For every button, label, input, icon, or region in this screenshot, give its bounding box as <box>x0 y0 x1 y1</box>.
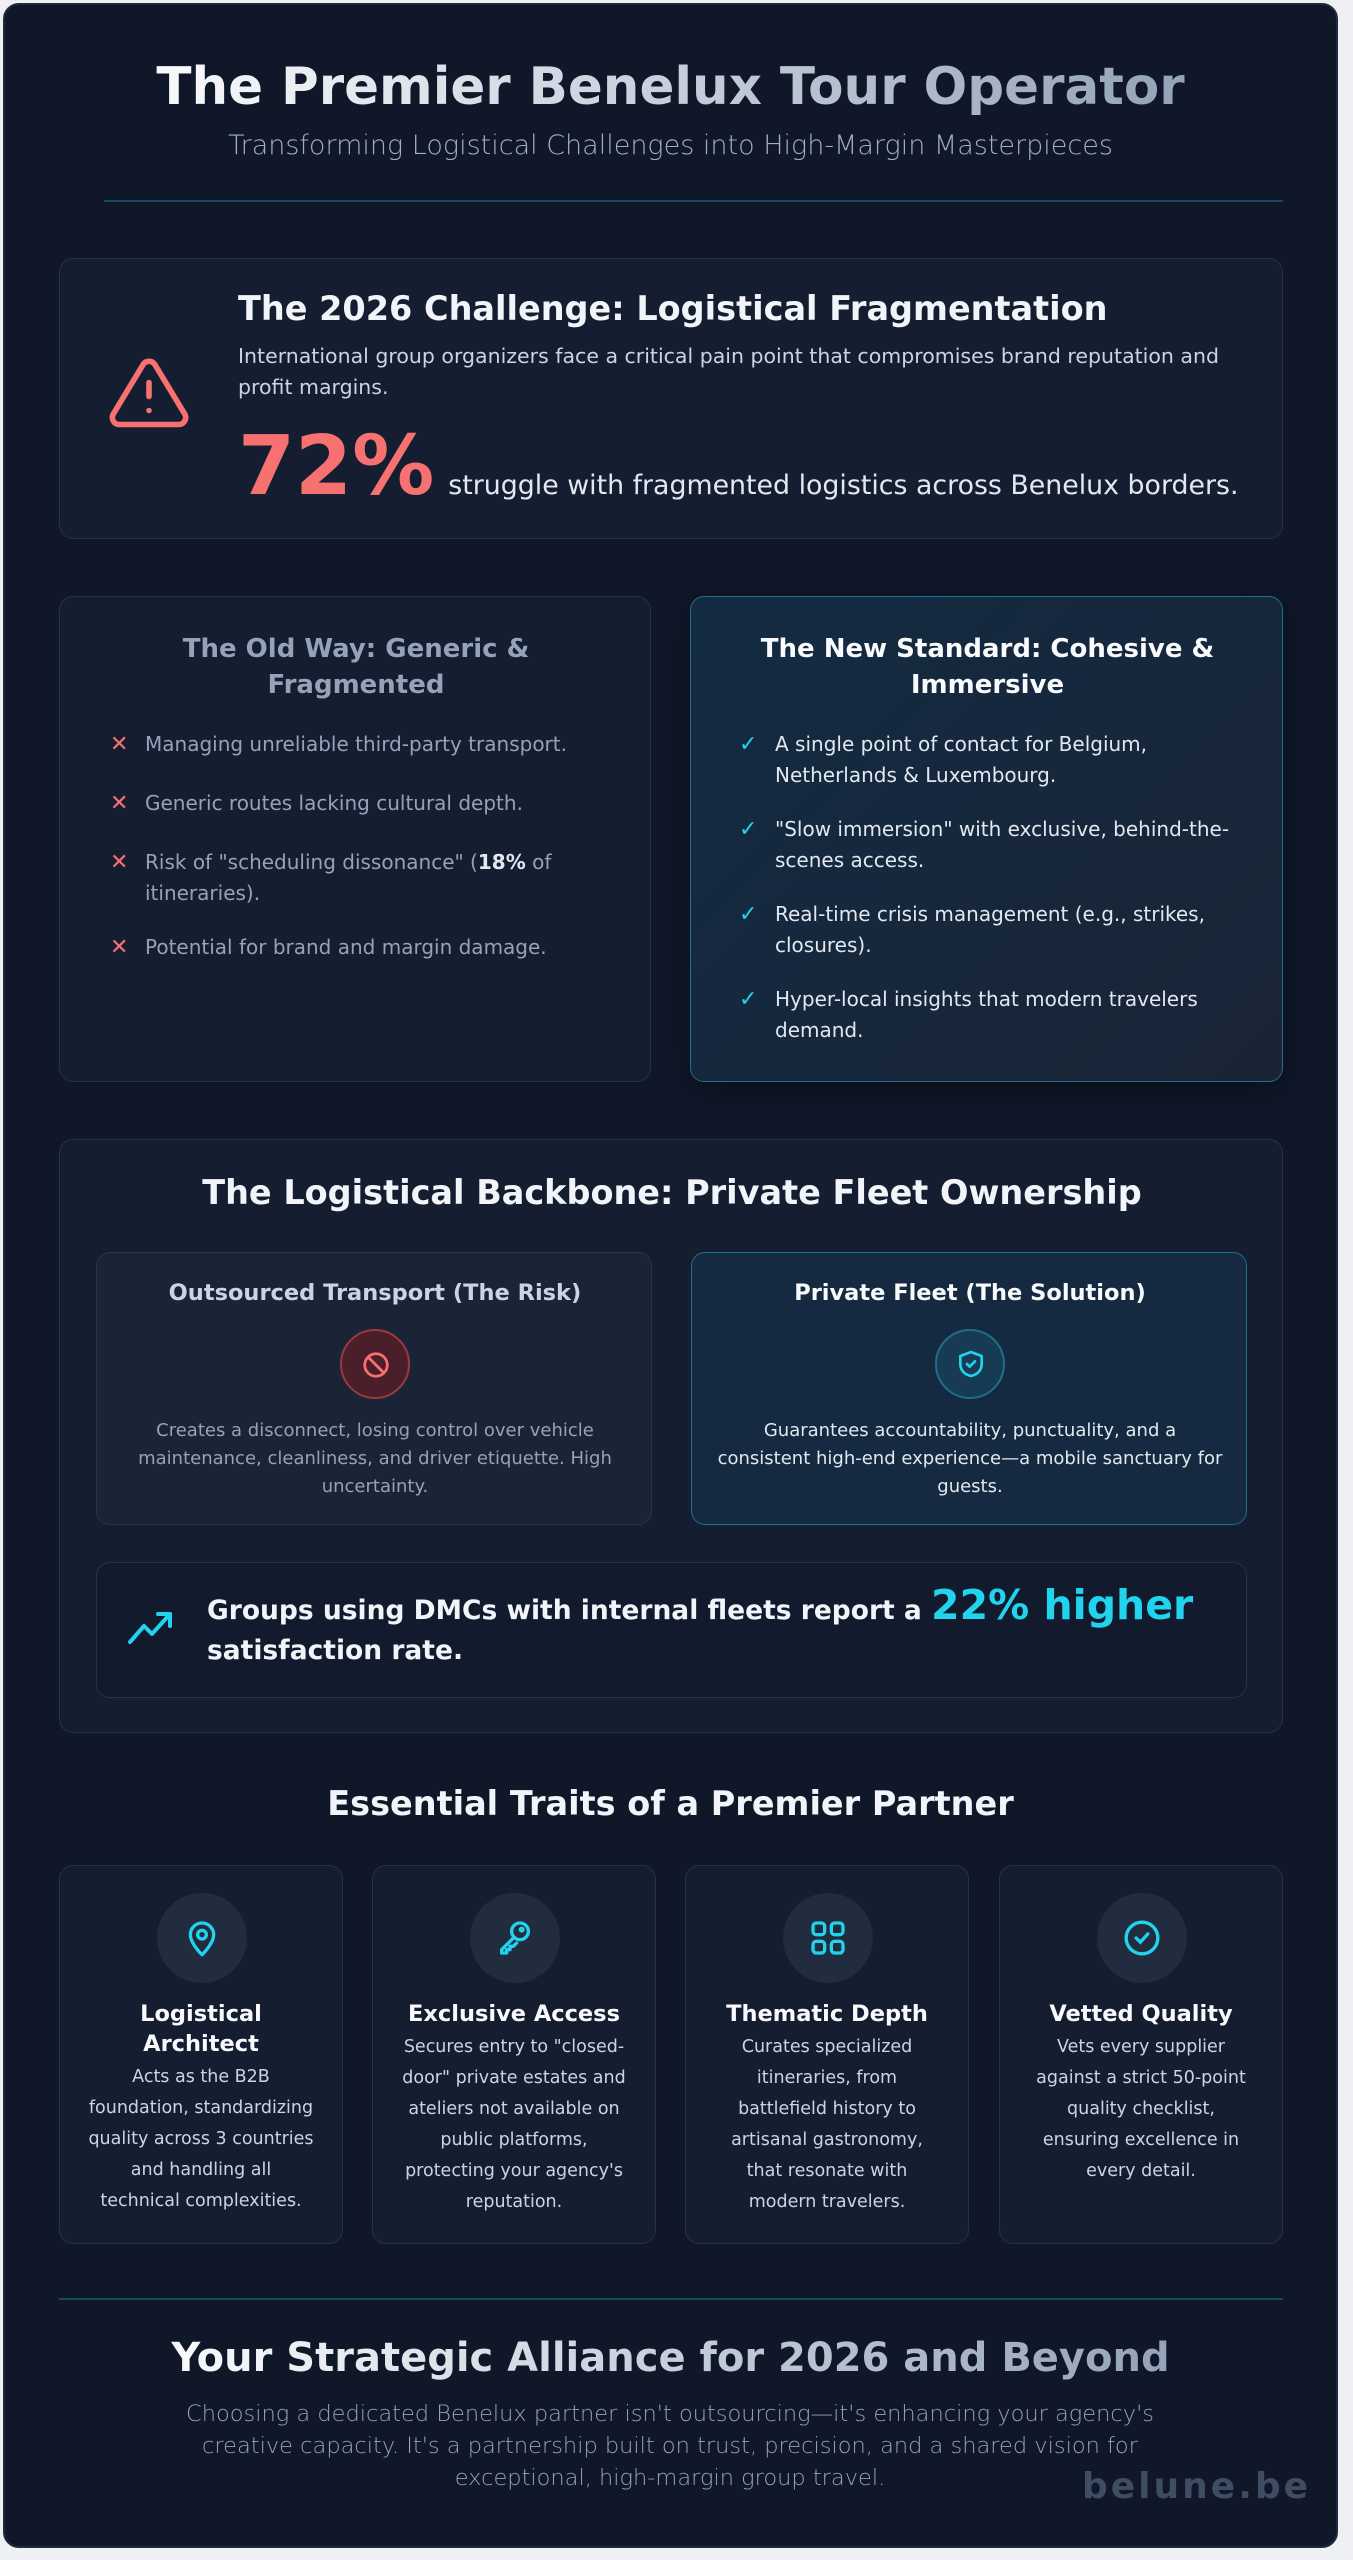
subtitle: Transforming Logistical Challenges into High-Margin Masterpieces <box>228 130 1113 161</box>
trait text: battlefield history to <box>738 2099 916 2119</box>
trait text <box>1036 2001 1246 2181</box>
text: stat: Groups using DMCs with internal fleets report a 22% higher satisfaction rate. <box>207 1581 1193 1666</box>
icon: key <box>470 1893 560 1983</box>
icon: grid <box>783 1893 873 1983</box>
trait text: Vetted Quality <box>1049 2001 1233 2027</box>
trait text: that resonate with <box>747 2161 907 2181</box>
list: old way: ✕ <box>110 732 128 757</box>
trait text: Logistical Architect <box>140 2001 262 2057</box>
title: The Premier Benelux Tour Operator <box>156 57 1185 117</box>
trait text: ensuring excellence in <box>1043 2130 1239 2150</box>
trait text: Secures entry to "closed- <box>404 2037 624 2057</box>
heading: old way: The Old Way: Generic & Fragmented <box>183 634 529 700</box>
trait text: Vets every supplier <box>1057 2037 1225 2057</box>
trait text: ateliers not available on <box>408 2099 620 2119</box>
text: private fleet: Guarantees accountability, punctuality, and a <box>764 1420 1176 1441</box>
subheading: private fleet: Private Fleet (The Solution) <box>794 1280 1146 1306</box>
trait text: foundation, standardizing <box>89 2098 313 2118</box>
list: old way: Potential for brand and margin damage. <box>145 935 547 959</box>
heading: essential traits: Essential Traits of a Premier Partner <box>327 1784 1014 1823</box>
heading: new standard: The New Standard: Cohesive & Immersive <box>761 634 1214 700</box>
trait text: artisanal gastronomy, <box>731 2130 923 2150</box>
list: old way: ✕ <box>110 935 128 960</box>
list: new standard: ✓ <box>739 732 757 757</box>
trait text <box>726 2001 928 2212</box>
panel: logistical backbone <box>59 1139 1283 1733</box>
list: old way: ✕ <box>110 791 128 816</box>
trait text <box>88 2001 314 2211</box>
icon: warning <box>110 358 188 428</box>
panel: new standard <box>690 596 1283 1082</box>
trait text: public platforms, <box>440 2130 588 2150</box>
list: old way <box>110 732 567 960</box>
callout: satisfaction stat <box>96 1562 1247 1698</box>
list: new standard: Real-time crisis management (e.g., strikes, closures). <box>775 902 1205 957</box>
icon: trend up <box>128 1612 172 1644</box>
trait text: Acts as the B2B <box>132 2067 270 2087</box>
list: old way: Managing unreliable third-party transport. <box>145 732 567 756</box>
panel: trait logistical architect <box>59 1865 343 2244</box>
list: new standard <box>739 732 1229 1042</box>
text: private fleet: consistent high-end experience—a mobile sanctuary for guests. <box>718 1448 1222 1497</box>
trait text: Exclusive Access <box>408 2001 620 2027</box>
subheading: outsourced: Outsourced Transport (The Risk) <box>169 1280 581 1306</box>
heading: backbone: The Logistical Backbone: Private Fleet Ownership <box>202 1173 1142 1212</box>
trait text: Thematic Depth <box>726 2001 928 2027</box>
trait text: quality across 3 countries <box>88 2129 314 2149</box>
trait text: modern travelers. <box>749 2192 905 2212</box>
list: old way: Generic routes lacking cultural depth. <box>145 791 523 815</box>
trait text <box>402 2001 626 2212</box>
text: challenge description: International group organizers face a critical pain point that compromises brand reputation and profit margins. <box>238 344 1219 399</box>
list: new standard: A single point of contact for Belgium, Netherlands & Luxembourg. <box>775 732 1147 787</box>
heading: challenge: The 2026 Challenge: Logistical Fragmentation <box>238 289 1108 328</box>
panel: challenge <box>59 258 1283 539</box>
brand: belune.be: belune.be <box>1082 2466 1311 2507</box>
trait text: against a strict 50-point <box>1036 2068 1246 2088</box>
trait text: protecting your agency's <box>405 2161 623 2181</box>
list: new standard: ✓ <box>739 902 757 927</box>
trait text: every detail. <box>1086 2161 1196 2181</box>
list: old way: ✕ <box>110 850 128 875</box>
sub-panel: private fleet <box>691 1252 1247 1525</box>
panel: trait thematic depth <box>685 1865 969 2244</box>
text: closing paragraph: Choosing a dedicated Benelux partner isn't outsourcing—it's enhancing your agency's creative capacity. It's a partnership built on trust, precision, and a shared vision for exceptional, high-margin group travel. <box>186 2401 1154 2491</box>
icon: pin <box>157 1893 247 1983</box>
list: old way: Risk of "scheduling dissonance" (18% of itineraries). <box>145 850 551 905</box>
stat: 72%: 72% struggle with fragmented logistics across Benelux borders. <box>238 419 1238 514</box>
text: private fleet <box>718 1420 1222 1497</box>
list: new standard: Hyper-local insights that modern travelers demand. <box>775 987 1198 1042</box>
icon: check circle <box>1097 1893 1187 1983</box>
panel: trait vetted quality <box>999 1865 1283 2244</box>
trait text: technical complexities. <box>100 2191 302 2211</box>
list: new standard: ✓ <box>739 987 757 1012</box>
trait text: and handling all <box>131 2160 271 2180</box>
list: new standard: ✓ <box>739 817 757 842</box>
trait text: itineraries, from <box>757 2068 897 2088</box>
trait text: quality checklist, <box>1067 2099 1215 2119</box>
sub-panel: outsourced <box>96 1252 652 1525</box>
panel: old way <box>59 596 651 1082</box>
icon: ban <box>340 1329 410 1399</box>
panel: trait exclusive access <box>372 1865 656 2244</box>
list: new standard: "Slow immersion" with exclusive, behind-the-scenes access. <box>775 817 1229 872</box>
trait text: door" private estates and <box>402 2068 626 2088</box>
trait text: reputation. <box>466 2192 562 2212</box>
icon: shield <box>935 1329 1005 1399</box>
heading: strategic alliance: Your Strategic Alliance for 2026 and Beyond <box>171 2335 1170 2381</box>
trait text: Curates specialized <box>742 2037 912 2057</box>
text: outsourced: Creates a disconnect, losing control over vehicle maintenance, cleanliness, and driver etiquette. High uncertainty. <box>138 1420 612 1497</box>
